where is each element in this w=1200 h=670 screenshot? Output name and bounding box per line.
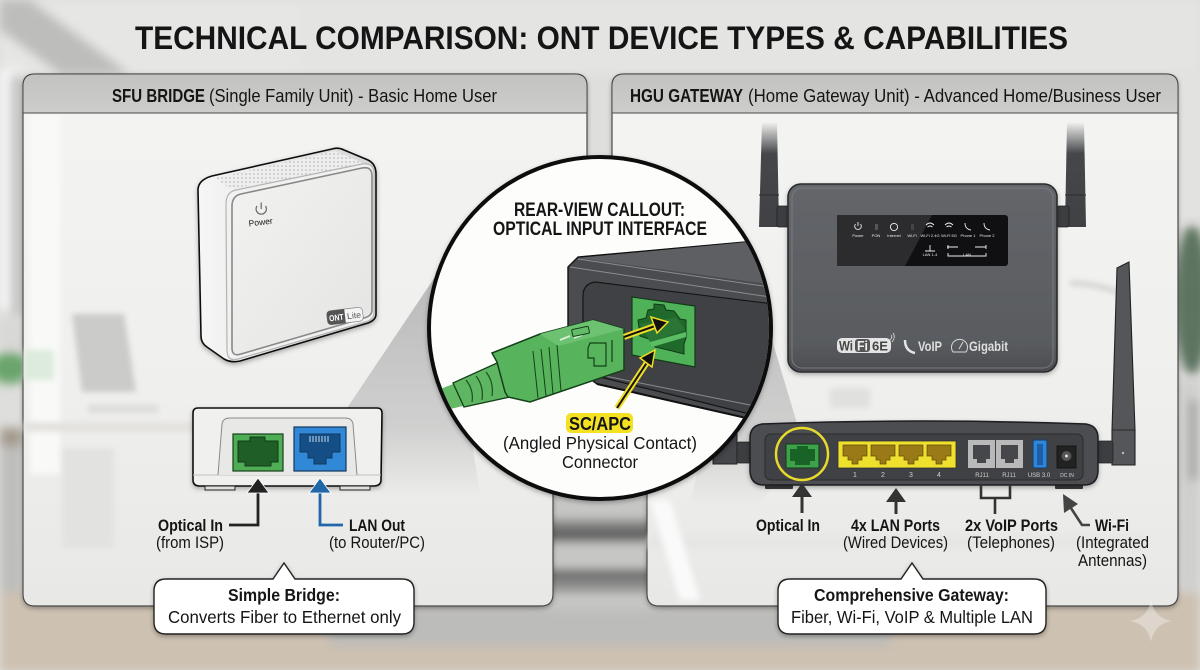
icon: HGU router front view	[759, 122, 1086, 372]
USB port	[1028, 440, 1051, 479]
LED display: LAN 1-4	[923, 252, 938, 257]
arrow: LAN out SFU	[309, 478, 343, 525]
badge: VoIP	[905, 338, 942, 354]
USB port: USB 3.0	[1028, 473, 1051, 479]
callout: comprehensive gateway: Comprehensive Gateway:	[814, 585, 1009, 605]
LAN ports: 2	[881, 472, 885, 479]
LED display: LAN	[963, 252, 971, 257]
connector label: Connector	[562, 452, 638, 472]
icon: SFU device rear ports	[193, 408, 382, 490]
LAN ports: 4	[937, 472, 941, 479]
watermark: sparkle	[1130, 600, 1172, 642]
label: Wi-Fi	[1076, 517, 1149, 570]
connector label	[503, 413, 697, 472]
panel header: SFU	[23, 74, 587, 113]
arrow: SC/APC pointer	[617, 350, 655, 408]
callout: comprehensive gateway	[778, 563, 1046, 634]
panel: SFU bridge	[23, 74, 587, 606]
badge: Wi-Fi 6E: 6E	[872, 338, 888, 354]
label: optical in SFU	[156, 517, 224, 552]
label: VoIP ports: 2x VoIP Ports	[965, 517, 1058, 535]
callout cone: right	[690, 250, 802, 505]
label: VoIP ports	[965, 517, 1058, 552]
callout heading	[493, 200, 707, 240]
arrow: optical in HGU	[792, 483, 812, 513]
VoIP ports	[968, 440, 1023, 479]
panel header: HGU: HGU GATEWAY	[630, 86, 743, 106]
LED display: PON	[872, 233, 880, 238]
label: optical in HGU: Optical In	[756, 517, 820, 535]
VoIP ports: RJ11	[1002, 473, 1016, 479]
badge: Wi-Fi 6E	[837, 333, 894, 354]
panel header: HGU	[612, 74, 1178, 113]
panel: HGU gateway	[612, 74, 1178, 606]
label: Wi-Fi: Wi-Fi	[1095, 517, 1129, 535]
LED display: Internet	[887, 233, 902, 238]
label: Wi-Fi: (Integrated	[1076, 534, 1149, 552]
badge: Wi-Fi 6E: Wi	[839, 338, 853, 354]
callout: comprehensive gateway: Fiber, Wi-Fi, VoIP & Multiple LAN	[791, 607, 1033, 627]
badge: ONT Lite: Lite	[346, 310, 362, 321]
label: LAN ports: (Wired Devices)	[843, 534, 948, 552]
badge: Gigabit	[952, 338, 1008, 354]
LED display: Wi-Fi	[907, 233, 917, 238]
panel header: SFU: (Single Family Unit) - Basic Home User	[209, 86, 497, 106]
badge: Wi-Fi 6E: Fi	[857, 338, 868, 354]
badge: ONT Lite: ONT	[329, 312, 345, 323]
enclosure close-up	[567, 241, 769, 418]
callout heading: OPTICAL INPUT INTERFACE	[493, 219, 707, 240]
arrow: fiber into port	[624, 317, 668, 337]
antenna: rear left	[713, 434, 751, 464]
VoIP ports: RJ11	[975, 473, 989, 479]
label: LAN out: (to Router/PC)	[329, 534, 425, 552]
callout: simple bridge: Converts Fiber to Ethernet only	[168, 607, 401, 627]
arrow: optical in SFU	[229, 478, 269, 525]
arrow: LAN ports	[886, 488, 906, 514]
LED display	[837, 215, 1008, 266]
label: LAN out: LAN Out	[349, 517, 405, 535]
icon: power symbol	[256, 202, 266, 214]
title: TECHNICAL COMPARISON: ONT DEVICE TYPES & CAPABILITIES	[135, 20, 1068, 56]
antenna: right top	[1057, 122, 1086, 227]
LED display: Wi-Fi 5G	[941, 233, 957, 238]
LED display: Phone 1	[961, 233, 976, 238]
LED display: Wi-Fi 2.4G	[920, 233, 940, 238]
LAN ports: 1	[853, 472, 857, 479]
icon: SFU device front view	[198, 148, 376, 362]
circular callout: optical input interface	[429, 157, 790, 499]
power label: Power	[248, 216, 273, 228]
LED display: Phone 2	[980, 233, 995, 238]
power jack: DC IN	[1060, 473, 1074, 479]
label: LAN ports	[843, 517, 948, 552]
label: LAN out	[329, 517, 425, 552]
bracket: VoIP ports	[981, 485, 1010, 514]
antenna: rear right	[1098, 262, 1135, 465]
panel header: SFU: SFU BRIDGE	[112, 86, 205, 106]
badge: VoIP: VoIP	[918, 338, 942, 354]
SC/APC connector plug	[440, 320, 624, 409]
LED display: Power	[852, 233, 864, 238]
label: LAN ports: 4x LAN Ports	[851, 517, 940, 535]
antenna: left top	[759, 122, 789, 227]
optical port	[233, 434, 283, 471]
badge: Gigabit: Gigabit	[969, 338, 1008, 354]
badge: ONT Lite	[326, 307, 364, 325]
callout: simple bridge	[154, 563, 414, 634]
callout heading: REAR-VIEW CALLOUT:	[514, 200, 685, 221]
label: optical in SFU: Optical In	[158, 517, 223, 535]
green port close-up	[632, 297, 695, 367]
LAN port	[294, 427, 346, 471]
arrow: Wi-Fi	[1063, 494, 1090, 525]
label: VoIP ports: (Telephones)	[967, 534, 1055, 552]
panel header: HGU: (Home Gateway Unit) - Advanced Home/Business User	[748, 86, 1161, 106]
connector label: SC/APC	[569, 414, 631, 434]
label: optical in SFU: (from ISP)	[156, 534, 224, 552]
callout: simple bridge: Simple Bridge:	[228, 585, 340, 605]
power jack	[1057, 446, 1076, 479]
label: Wi-Fi: Antennas)	[1078, 552, 1147, 570]
connector label: (Angled Physical Contact)	[503, 433, 697, 453]
LAN ports	[838, 441, 956, 479]
callout cone: left	[337, 262, 480, 495]
LAN ports: 3	[909, 472, 913, 479]
icon: HGU router rear view	[713, 262, 1135, 489]
optical port highlighted	[776, 428, 828, 480]
